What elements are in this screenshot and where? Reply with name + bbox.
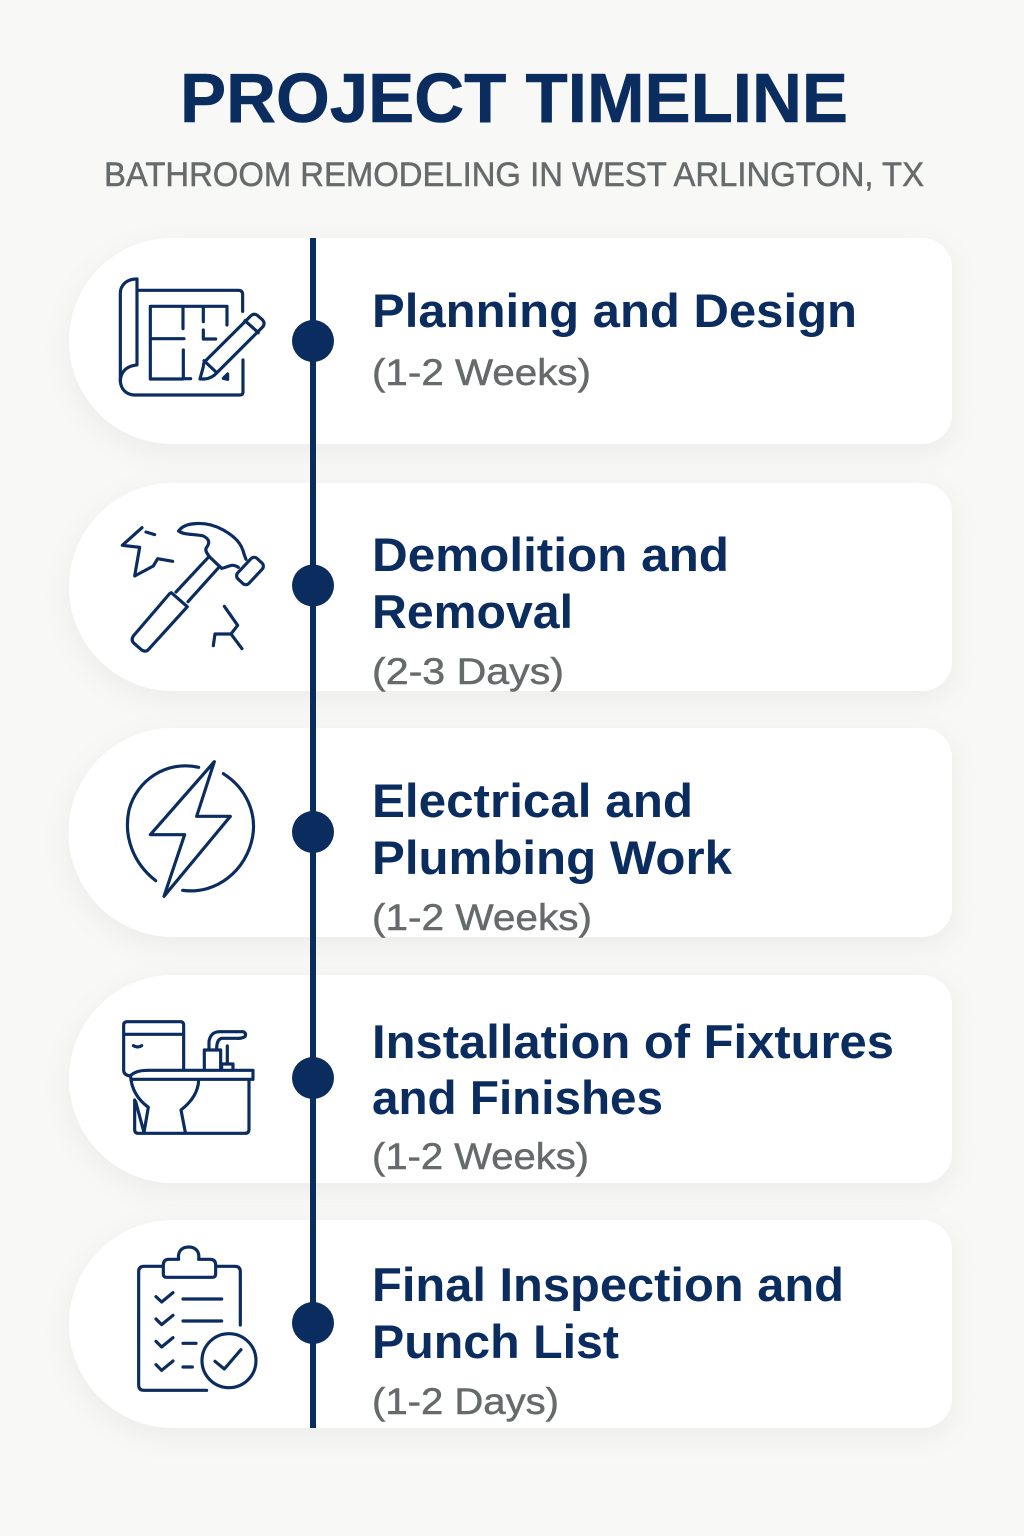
heading line 1: Electrical and bbox=[372, 774, 693, 827]
card: demolition background bbox=[69, 483, 952, 691]
timeline vertical line bbox=[310, 238, 316, 1428]
card: planning background bbox=[69, 238, 952, 444]
heading line 2: Removal bbox=[372, 585, 573, 638]
heading line 1: Demolition and bbox=[372, 528, 729, 581]
card: installation background bbox=[69, 975, 952, 1183]
timeline dot bbox=[292, 564, 334, 606]
duration: (1-2 Weeks) bbox=[372, 897, 592, 938]
step 2: demolition and removal bbox=[122, 523, 729, 692]
heading line 2: Punch List bbox=[372, 1315, 619, 1368]
duration: (1-2 Days) bbox=[372, 1381, 559, 1422]
heading line 2: Plumbing Work bbox=[372, 831, 733, 884]
timeline dot bbox=[292, 811, 334, 853]
card: electrical background bbox=[68, 728, 952, 937]
heading line 1: Final Inspection and bbox=[372, 1258, 844, 1311]
duration: (2-3 Days) bbox=[372, 651, 564, 692]
heading: Planning and Design bbox=[372, 284, 857, 337]
heading line 1: Installation of Fixtures bbox=[372, 1015, 894, 1068]
card: inspection background bbox=[69, 1220, 952, 1428]
icon: hammer and cracks bbox=[122, 523, 265, 651]
step 1: planning and design bbox=[120, 279, 857, 395]
timeline dot bbox=[292, 1302, 334, 1344]
timeline dot bbox=[292, 1057, 334, 1099]
icon: blueprint and pencil bbox=[120, 279, 264, 395]
duration: (1-2 Weeks) bbox=[372, 1136, 589, 1177]
step 5: final inspection and punch list bbox=[139, 1247, 844, 1422]
heading line 2: and Finishes bbox=[372, 1071, 663, 1124]
timeline dot bbox=[292, 320, 334, 362]
subtitle: BATHROOM REMODELING IN WEST ARLINGTON, TX bbox=[104, 156, 924, 194]
step 4: installation of fixtures and finishes bbox=[124, 1015, 894, 1177]
icon: clipboard checklist bbox=[139, 1247, 256, 1390]
duration: (1-2 Weeks) bbox=[372, 352, 591, 393]
icon: lightning bolt in circle bbox=[127, 762, 254, 896]
icon: toilet and vanity bbox=[124, 1022, 253, 1133]
step 3: electrical and plumbing work bbox=[127, 762, 733, 938]
title: PROJECT TIMELINE bbox=[180, 59, 848, 137]
